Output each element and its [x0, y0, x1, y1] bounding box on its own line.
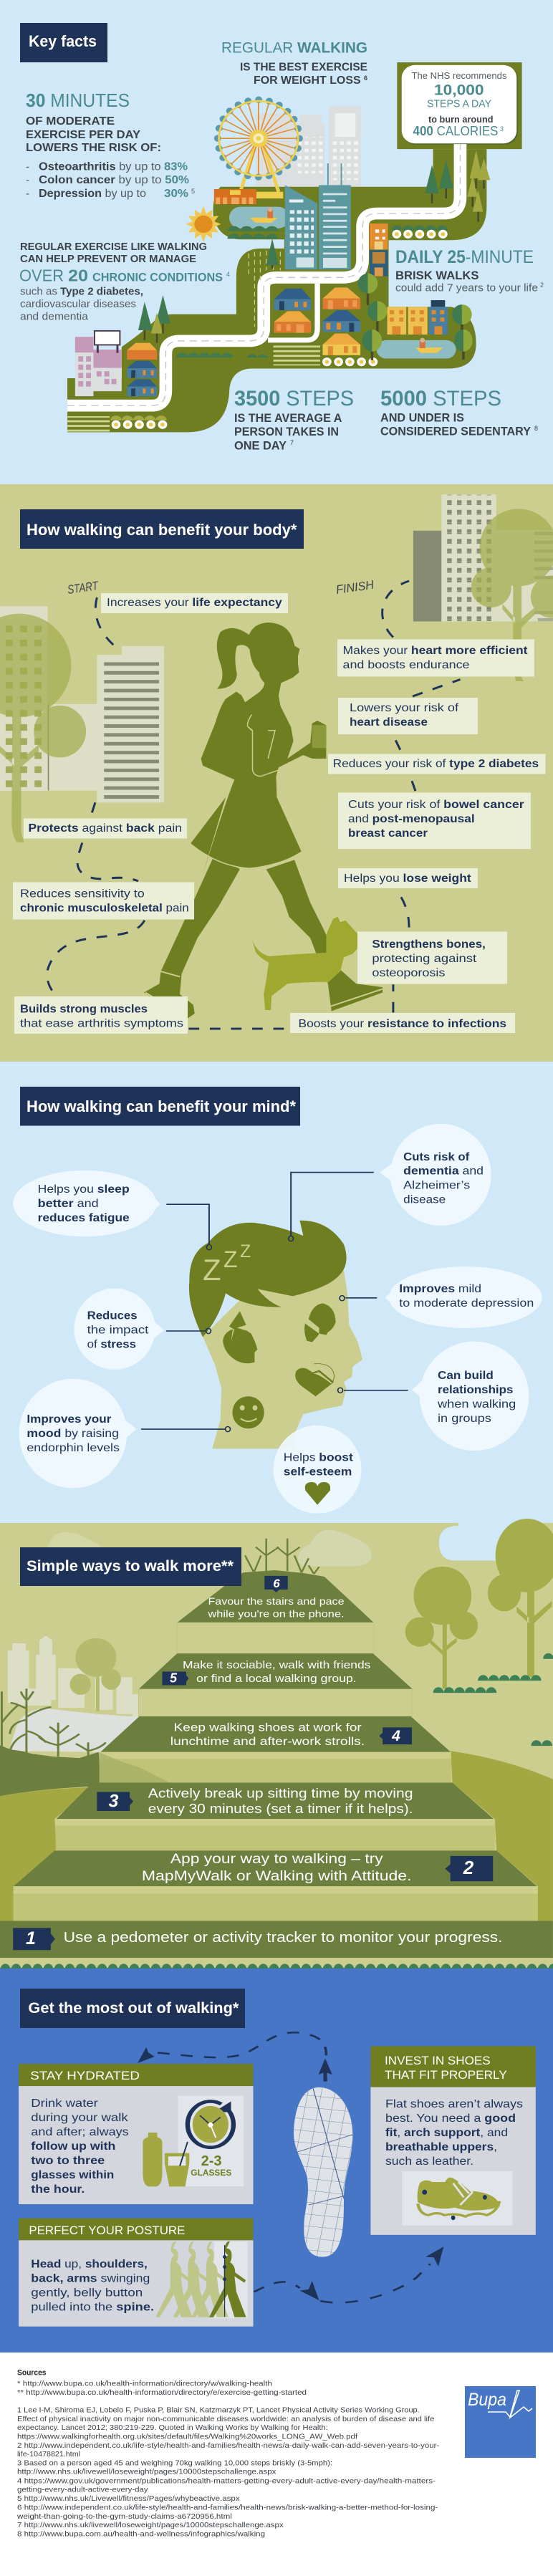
- heading: simple ways: [20, 1547, 241, 1586]
- benefit: musculoskeletal pain: [13, 883, 194, 920]
- fact: 30 minutes: 30 MINUTES: [26, 90, 130, 111]
- icon: zzz sleep: Z: [240, 1241, 251, 1261]
- fact: regular walking: REGULAR WALKING: [221, 40, 367, 57]
- benefit: heart efficient: [337, 639, 534, 676]
- label: finish: FINISH: [335, 578, 375, 597]
- fact: regular walking: FOR WEIGHT LOSS: [254, 75, 361, 87]
- icon: zzz sleep: [203, 1241, 251, 1287]
- section: key facts: [0, 0, 553, 484]
- step 3: [109, 1787, 413, 1816]
- benefit: heart efficient: and boosts endurance: [342, 659, 470, 671]
- fact: 5000 steps: CONSIDERED SEDENTARY: [380, 425, 532, 438]
- heading: key facts: Key facts: [29, 32, 97, 50]
- benefit: back pain: [24, 818, 187, 838]
- step 6: while you're on the phone.: [207, 1608, 344, 1620]
- illustration: panels, insole and arrows: [19, 2032, 536, 2327]
- fact: 30 minutes: -: [26, 188, 29, 200]
- fact: chronic conditions: [19, 241, 230, 322]
- sources list: weight-than-going-to-the-gym-study-claims-a6720956.html: [16, 2512, 232, 2521]
- benefit: strong muscles: [14, 996, 188, 1034]
- panel: stay hydrated: two to three: [31, 2155, 105, 2167]
- bubble: relationships: Can build: [438, 1370, 494, 1382]
- step 1: [26, 1928, 503, 1948]
- benefit: strengthens bones: Strengthens bones,: [372, 938, 486, 951]
- fact: regular walking: [221, 40, 367, 87]
- benefit: bowel and breast cancer: breast cancer: [348, 827, 428, 840]
- bubble: self-esteem: [284, 1452, 354, 1479]
- step 4: 4: [391, 1728, 400, 1744]
- panel: stay hydrated: follow up with: [31, 2140, 115, 2153]
- illustration: buildings, trees and walker: [0, 494, 553, 1029]
- sources list: * http://www.bupa.co.uk/health-information/directory/w/walking-health: [17, 2379, 272, 2388]
- panel: invest in shoes: best. You need a good: [385, 2113, 516, 2125]
- bubble: sleep: reduces fatigue: [38, 1212, 130, 1224]
- benefit: strong muscles: that ease arthritis symptoms: [20, 1018, 183, 1030]
- panel: invest in shoes: [385, 2054, 523, 2168]
- panel: invest in shoes: such as leather.: [385, 2156, 473, 2168]
- step 4: Keep walking shoes at work for: [174, 1722, 362, 1734]
- fact: 5000 steps: [380, 387, 538, 438]
- sources list: 4 https://www.gov.uk/government/publications/health-matters-getting-every-adult-active-every-day/health-matters-: [17, 2477, 436, 2486]
- panel: stay hydrated: and after; always: [31, 2126, 129, 2138]
- benefit: heart disease: heart disease: [350, 716, 428, 729]
- bubble: dementia: Alzheimer’s: [403, 1179, 470, 1192]
- panel: stay hydrated: the hour.: [31, 2183, 85, 2196]
- panel: stay hydrated: 2-3: [201, 2153, 222, 2169]
- benefit: bowel and breast cancer: and post-menopausal: [348, 813, 475, 825]
- panel: invest in shoes: INVEST IN SHOES: [385, 2054, 491, 2067]
- benefit: life expectancy: Increases your life expectancy: [107, 597, 282, 609]
- heading: body benefits: How walking can benefit your body*: [27, 521, 297, 539]
- step 5: or find a local walking group.: [196, 1673, 357, 1685]
- sources list: life-10478821.html: [17, 2450, 80, 2459]
- illustration: landscape and staircase: [0, 1519, 553, 1957]
- fact: 30 minutes: Colon cancer by up to 50%: [39, 174, 189, 186]
- panel: perfect your posture: PERFECT YOUR POSTURE: [29, 2224, 185, 2237]
- benefit: musculoskeletal pain: chronic musculoskeletal pain: [20, 903, 189, 915]
- callout: NHS recommends: 400 CALORIES: [413, 124, 499, 138]
- body section background: [0, 484, 553, 1062]
- fact: chronic conditions: and dementia: [20, 311, 89, 322]
- section: mind benefits: [0, 1062, 553, 1523]
- bubble: sleep: [38, 1183, 130, 1224]
- step 3: every 30 minutes (set a timer if it helps).: [148, 1802, 413, 1816]
- bubble: relationships: [437, 1370, 516, 1425]
- fact: 30 minutes: EXERCISE PER DAY: [26, 129, 140, 141]
- step 4: [170, 1722, 400, 1748]
- sources list: 7 http://www.nhs.uk/livewell/loseweight/pages/10000stepschallenge.aspx: [17, 2521, 284, 2529]
- heading: mind benefits: How walking can benefit your mind*: [27, 1097, 296, 1115]
- step 6: 6: [273, 1577, 280, 1590]
- fact: daily 25-minute: could add 7 years to your life: [395, 282, 538, 294]
- benefit: lose weight: Helps you lose weight: [344, 873, 471, 885]
- heading: most out of walking: [20, 1989, 245, 2028]
- fact: 3500 steps: 3500 STEPS: [234, 387, 354, 410]
- benefit: strong muscles: Builds strong muscles: [20, 1003, 148, 1016]
- heading: simple ways: Simple ways to walk more**: [27, 1558, 234, 1575]
- fact: 30 minutes: -: [26, 160, 29, 173]
- city road map illustration: [67, 62, 522, 432]
- bubble: dementia: Cuts risk of: [403, 1151, 470, 1163]
- callout: NHS recommends: The NHS recommends: [411, 70, 507, 81]
- panel: perfect your posture: Head up, shoulders,: [31, 2258, 148, 2271]
- panel: stay hydrated: [30, 2069, 231, 2196]
- bubble: depression: Improves mild: [399, 1283, 481, 1295]
- sources list: 2 http://www.independent.co.uk/life-style/health-and-families/health-news/a-daily-walk-can-add-seven-years-to-your-: [17, 2441, 440, 2450]
- sources list: 5 http://www.nhs.uk/Livewell/fitness/Pages/whybeactive.aspx: [17, 2494, 240, 2503]
- fact: 30 minutes: -: [26, 174, 29, 186]
- sources list: getting-every-adult-active-every-day: [17, 2486, 148, 2494]
- panel: invest in shoes: breathable uppers ,: [385, 2141, 497, 2153]
- icon: zzz sleep: Z: [203, 1253, 221, 1287]
- step 1: 1: [26, 1928, 36, 1948]
- section: sources: [0, 2352, 553, 2576]
- logo: Bupa: Bupa: [468, 2390, 506, 2410]
- benefit: bowel and breast cancer: [338, 792, 531, 849]
- logo: Bupa: [465, 2386, 536, 2458]
- fact: 5000 steps: 8: [534, 425, 538, 432]
- step 2: App your way to walking – try: [170, 1851, 383, 1867]
- bubble: stress: of stress: [87, 1339, 136, 1351]
- bubble: depression: [399, 1283, 534, 1309]
- callout: NHS recommends: [411, 70, 507, 138]
- step 2: MapMyWalk or Walking with Attitude.: [142, 1868, 411, 1884]
- fact: 3500 steps: 7: [290, 439, 294, 446]
- benefit: type 2 diabetes: [328, 754, 546, 774]
- benefit: heart disease: Lowers your risk of: [350, 702, 459, 714]
- fact: 30 minutes: OF MODERATE: [26, 115, 115, 128]
- bubble: dementia: disease: [403, 1194, 446, 1206]
- section background with hedge: [0, 1956, 553, 2352]
- bubble: dementia: [403, 1151, 484, 1206]
- callout: NHS recommends: 10,000: [434, 82, 484, 99]
- sources list: 8 http://www.bupa.com.au/health-and-wellness/infographics/walking: [17, 2529, 265, 2538]
- fact: 3500 steps: ONE DAY: [234, 439, 287, 453]
- fact: 3500 steps: IS THE AVERAGE A: [234, 411, 342, 425]
- panel: invest in shoes: THAT FIT PROPERLY: [385, 2068, 507, 2082]
- walk more background: [0, 1523, 553, 1969]
- bubble: relationships: when walking: [437, 1398, 516, 1410]
- sources list: 6 http://www.independent.co.uk/life-style/health-and-families/health-news/brisk-walking-a-better-method-for-losing-: [17, 2503, 438, 2512]
- fact: 5000 steps: AND UNDER IS: [380, 411, 464, 424]
- fact: 3500 steps: [234, 387, 354, 453]
- step 3: Actively break up sitting time by moving: [148, 1787, 413, 1801]
- panel: perfect your posture: pulled into the spine.: [31, 2301, 154, 2314]
- label: start: START: [67, 579, 100, 597]
- bubble: mood: Improves your: [27, 1413, 111, 1426]
- fact: 30 minutes: Osteoarthritis by up to 83%: [39, 160, 188, 173]
- bubble: mood: endorphin levels: [27, 1442, 120, 1454]
- step 6: Favour the stairs and pace: [208, 1595, 345, 1607]
- benefit: heart efficient: Makes your heart more efficient: [342, 645, 527, 657]
- bubble: sleep: better and: [38, 1198, 99, 1210]
- section: get the most out of walking: [0, 1956, 553, 2352]
- bubble: depression: to moderate depression: [399, 1297, 534, 1309]
- panel: invest in shoes: fit, arch support , and: [385, 2127, 508, 2139]
- bubble: mood: mood by raising: [27, 1428, 119, 1440]
- bubble: self-esteem: Helps boost: [284, 1452, 354, 1464]
- step 5: 5: [170, 1671, 178, 1685]
- section: simple ways to walk more: [0, 1519, 553, 1969]
- panel: stay hydrated: Drink water: [31, 2097, 99, 2110]
- sources list: https://www.walkingforhealth.org.uk/sites/default/files/Walking%20works_LONG_AW_Web.pdf: [17, 2432, 357, 2441]
- callout: NHS recommends: to burn around: [428, 114, 494, 125]
- benefit: strengthens bones: osteoporosis: [372, 967, 446, 979]
- panel: invest in shoes: Flat shoes aren’t always: [385, 2098, 523, 2110]
- step 6: [207, 1577, 345, 1620]
- bubble: stress: the impact: [87, 1325, 149, 1337]
- sources background: [0, 2352, 553, 2576]
- fact: 30 minutes: 5: [191, 188, 195, 195]
- panel: stay hydrated: during your walk: [31, 2112, 129, 2124]
- fact: chronic conditions: cardiovascular diseases: [20, 298, 136, 310]
- benefit: heart disease: [338, 698, 478, 734]
- fact: daily 25-minute: [395, 247, 544, 294]
- sources list: Effect of physical inactivity on major non-communicable diseases worldwide: an analysis of burden of disease and life: [17, 2415, 435, 2423]
- benefit: back pain: Protects against back pain: [28, 822, 182, 835]
- benefit: resistance to infections: Boosts your resistance to infections: [298, 1018, 506, 1030]
- benefit: life expectancy: [101, 593, 288, 613]
- panel: stay hydrated: STAY HYDRATED: [30, 2069, 140, 2082]
- fact: chronic conditions: CAN HELP PREVENT OR MANAGE: [20, 254, 196, 265]
- step 2: [142, 1851, 474, 1884]
- fact: chronic conditions: such as Type 2 diabetes,: [20, 286, 143, 298]
- panel: stay hydrated: GLASSES: [191, 2168, 231, 2178]
- fact: 30 minutes: LOWERS THE RISK OF:: [26, 142, 161, 154]
- fact: daily 25-minute: 2: [540, 282, 544, 289]
- bubble: self-esteem: self-esteem: [284, 1466, 352, 1479]
- bubble: stress: Reduces: [87, 1309, 138, 1322]
- benefit: bowel and breast cancer: Cuts your risk of bowel cancer: [348, 799, 524, 811]
- sources list: http://www.nhs.uk/livewell/loseweight/pages/10000stepschallenge.aspx: [17, 2468, 276, 2476]
- fact: 30 minutes: Depression by up to: [39, 188, 146, 200]
- fact: 30 minutes: [26, 90, 195, 200]
- fact: regular walking: IS THE BEST EXERCISE: [240, 62, 367, 74]
- fact: chronic conditions: REGULAR EXERCISE LIKE WALKING: [20, 241, 207, 253]
- icon: zzz sleep: Z: [223, 1246, 238, 1272]
- fact: chronic conditions: 20: [68, 266, 88, 285]
- fact: 30 minutes: 30%: [164, 188, 188, 200]
- panel: perfect your posture: [29, 2224, 185, 2314]
- bubble: relationships: in groups: [438, 1413, 491, 1425]
- heading: most out of walking: Get the most out of walking*: [28, 2000, 239, 2017]
- benefit: type 2 diabetes: Reduces your risk of type 2 diabetes: [333, 758, 539, 770]
- fact: daily 25-minute: BRISK WALKS: [395, 269, 479, 282]
- benefit: musculoskeletal pain: Reduces sensitivity to: [20, 888, 145, 900]
- step 3: 3: [109, 1791, 119, 1811]
- sources list: expectancy. Lancet 2012; 380:219-229. Quoted in Walking Works by Walking for Health:: [17, 2423, 328, 2432]
- panel: perfect your posture: gently, belly button: [31, 2287, 143, 2299]
- benefit: strengthens bones: protecting against: [372, 953, 477, 965]
- section: body benefits: [0, 484, 553, 1062]
- step 2: 2: [463, 1857, 474, 1878]
- heading: sources: Sources: [17, 2369, 46, 2378]
- step 5: Make it sociable, walk with friends: [183, 1659, 370, 1671]
- callout: NHS recommends: 3: [500, 125, 504, 133]
- bubble: sleep: Helps you sleep: [38, 1183, 130, 1196]
- mind section background: [0, 1062, 553, 1523]
- fact: daily 25-minute: DAILY 25-MINUTE: [395, 247, 534, 267]
- benefit: strengthens bones: [357, 931, 507, 984]
- step 5: [170, 1659, 370, 1685]
- panel: stay hydrated: glasses within: [31, 2169, 114, 2181]
- panel: perfect your posture: back, arms swinging: [31, 2272, 150, 2285]
- illustration: head with icons and callout bubbles: [13, 1124, 542, 1514]
- key facts background: [0, 0, 553, 484]
- bubble: relationships: relationships: [438, 1384, 514, 1396]
- sources list: ** http://www.bupa.co.uk/health-information/directory/e/exercise-getting-started: [17, 2388, 307, 2397]
- benefit: lose weight: [338, 868, 478, 888]
- sources list: 3 Based on a person aged 45 and weighing 70kg walking 10,000 steps briskly (3-5mph):: [17, 2459, 332, 2468]
- fact: chronic conditions: OVER: [19, 266, 64, 285]
- step 4: lunchtime and after-work strolls.: [170, 1736, 365, 1748]
- bubble: mood: [27, 1413, 120, 1454]
- heading: key facts: [20, 23, 107, 62]
- fact: 3500 steps: PERSON TAKES IN: [234, 425, 339, 438]
- fact: 5000 steps: 5000 STEPS: [380, 387, 501, 410]
- heading: body benefits: [20, 509, 304, 549]
- bubble: stress: [87, 1309, 149, 1351]
- benefit: resistance to infections: [290, 1013, 515, 1033]
- fact: chronic conditions: 4: [226, 271, 230, 278]
- bubble: dementia: dementia and: [403, 1165, 484, 1178]
- fact: chronic conditions: CHRONIC CONDITIONS: [92, 271, 223, 284]
- sources list: [16, 2379, 440, 2538]
- heading: mind benefits: [20, 1087, 300, 1126]
- fact: regular walking: 6: [364, 75, 367, 82]
- step 1: Use a pedometer or activity tracker to monitor your progress.: [64, 1930, 503, 1946]
- sources list: 1 Lee I-M, Shiroma EJ, Lobelo F, Puska P, Blair SN, Katzmarzyk PT, Lancet Physical Activity Series Working Group.: [17, 2406, 420, 2415]
- callout: NHS recommends: STEPS A DAY: [427, 97, 491, 110]
